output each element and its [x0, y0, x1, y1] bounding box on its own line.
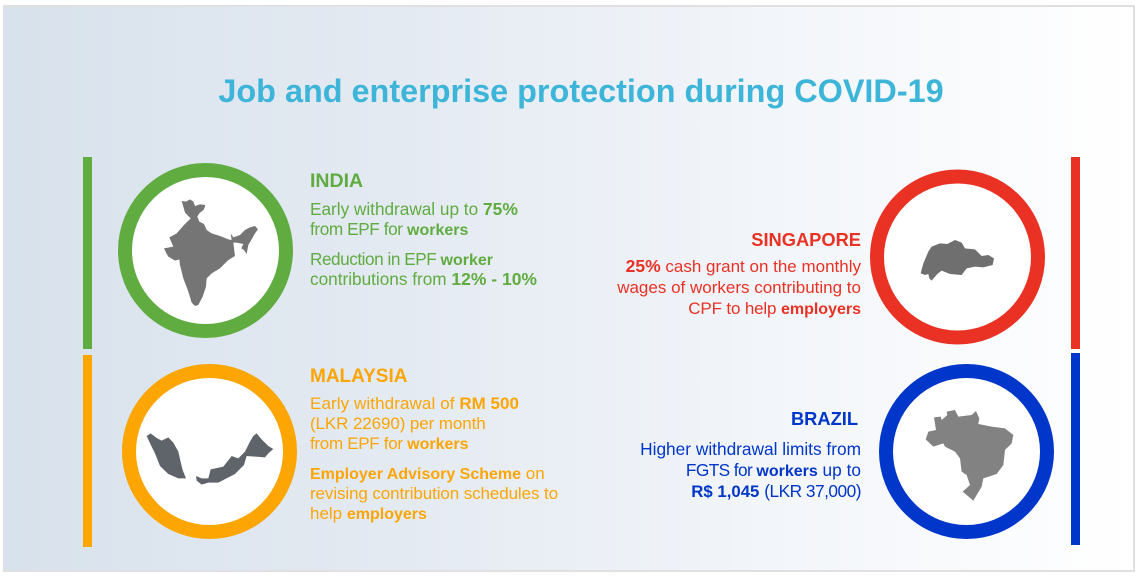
India green bar	[83, 157, 92, 349]
India text block	[310, 170, 537, 289]
Brazil heading: BRAZIL	[791, 408, 858, 429]
icon: Singapore map in red ring	[870, 170, 1045, 344]
India withdrawal text	[310, 199, 518, 239]
Malaysia employer scheme text: Employer Advisory Scheme on	[310, 464, 545, 483]
Malaysia heading: MALAYSIA	[310, 366, 407, 387]
India contribution text: Reduction in EPF worker	[310, 249, 493, 269]
Brazil withdrawal text	[640, 439, 861, 501]
icon: Brazil map in blue ring	[879, 364, 1054, 539]
Brazil withdrawal text: Higher withdrawal limits from	[640, 439, 861, 459]
Malaysia orange bar	[83, 355, 92, 547]
Malaysia withdrawal text: (LKR 22690) per month	[310, 414, 486, 433]
panel: Malaysia	[83, 355, 558, 547]
Malaysia employer scheme text	[310, 464, 558, 523]
Singapore red bar	[1071, 157, 1080, 349]
Brazil text block	[640, 408, 861, 501]
India contribution text: contributions from 12% - 10%	[310, 269, 537, 289]
India heading: INDIA	[310, 170, 363, 192]
Malaysia withdrawal text: from EPF for workers	[310, 434, 469, 453]
icon: Malaysia map in orange ring	[122, 364, 297, 539]
title: Job and enterprise protection during COVID-19	[218, 73, 944, 109]
Singapore heading: SINGAPORE	[751, 229, 861, 250]
Brazil withdrawal text: FGTS for workers up to	[686, 460, 861, 480]
panel: Singapore	[617, 157, 1080, 349]
icon: India map in green ring	[118, 163, 293, 338]
Singapore grant text: 25% cash grant on the monthly	[626, 256, 861, 276]
Brazil withdrawal text: R$ 1,045 (LKR 37,000)	[691, 481, 861, 501]
Malaysia employer scheme text: revising contribution schedules to	[310, 484, 558, 503]
Malaysia withdrawal text: Early withdrawal of RM 500	[310, 394, 519, 413]
panel: India	[83, 157, 537, 349]
Singapore grant text: wages of workers contributing to	[617, 278, 861, 297]
Brazil blue bar	[1071, 353, 1080, 545]
Malaysia withdrawal text	[310, 394, 519, 453]
panel: Brazil	[640, 353, 1080, 545]
India withdrawal text: from EPF for workers	[310, 219, 468, 239]
Singapore grant text: CPF to help employers	[688, 299, 861, 318]
India contribution text	[310, 249, 537, 289]
Singapore grant text	[617, 256, 861, 318]
India withdrawal text: Early withdrawal up to 75%	[310, 199, 518, 219]
Malaysia employer scheme text: help employers	[310, 504, 427, 523]
Singapore text block	[617, 229, 861, 318]
Malaysia text block	[310, 366, 558, 523]
